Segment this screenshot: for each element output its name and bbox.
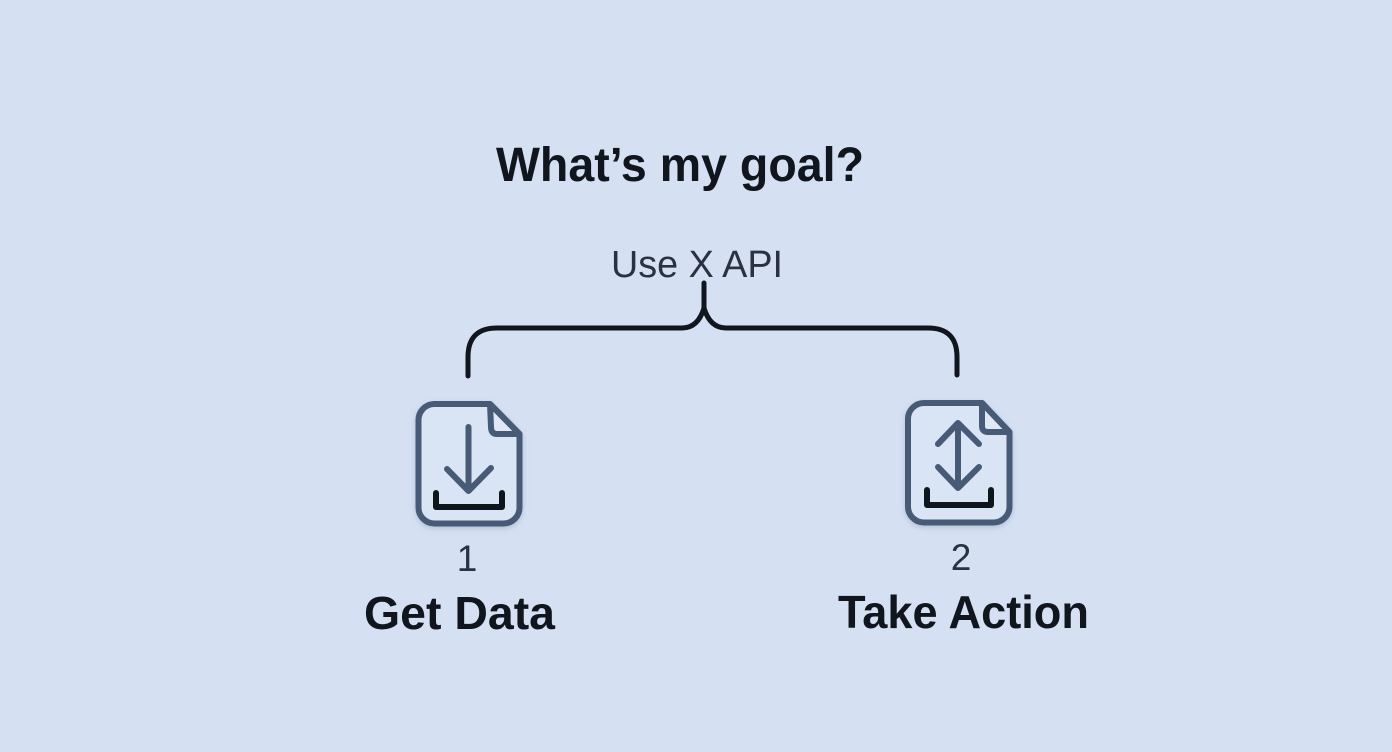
step number 1: 1 (457, 538, 477, 579)
label: Use X API: Use X API (611, 244, 783, 286)
title: What’s my goal? (496, 139, 864, 192)
icon: document download (418, 404, 520, 524)
step number 2: 2 (951, 537, 971, 578)
icon: document upload and download (908, 403, 1010, 522)
bracket connector (468, 283, 957, 376)
label: Get Data: Get Data (364, 587, 555, 639)
label: Take Action: Take Action (838, 586, 1089, 638)
